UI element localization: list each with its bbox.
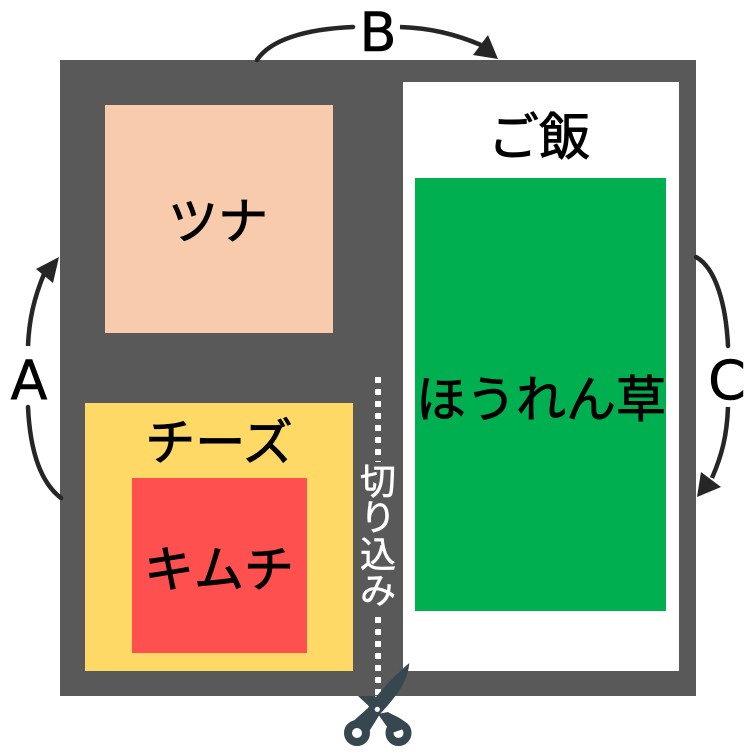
heading: rice: ご飯 — [488, 96, 590, 170]
arrow C — [696, 257, 746, 497]
cut line — [375, 377, 381, 696]
icon: scissors lower blade — [358, 696, 381, 709]
cut label: 切 — [360, 453, 396, 505]
cut label: み — [360, 562, 396, 614]
cut label — [360, 453, 396, 617]
label: spinach: ほうれん草 — [416, 360, 666, 432]
label: cheese: チーズ — [145, 403, 293, 475]
arrow B — [257, 1, 498, 64]
panel: kimchi — [132, 478, 307, 653]
panel: spinach — [415, 178, 666, 611]
icon: scissors — [348, 663, 409, 742]
cut label: り — [360, 489, 396, 541]
arrow A — [11, 257, 61, 498]
panel: cheese — [85, 403, 353, 671]
panel: dark tray — [60, 60, 696, 696]
label B: B — [359, 1, 397, 64]
panel: rice — [403, 82, 679, 671]
cut label: 込 — [360, 526, 396, 578]
label: tuna: ツナ — [168, 182, 268, 254]
label C: C — [708, 349, 746, 412]
label A: A — [11, 349, 48, 412]
panel: tuna — [105, 105, 333, 333]
label: kimchi: キムチ — [144, 530, 294, 602]
